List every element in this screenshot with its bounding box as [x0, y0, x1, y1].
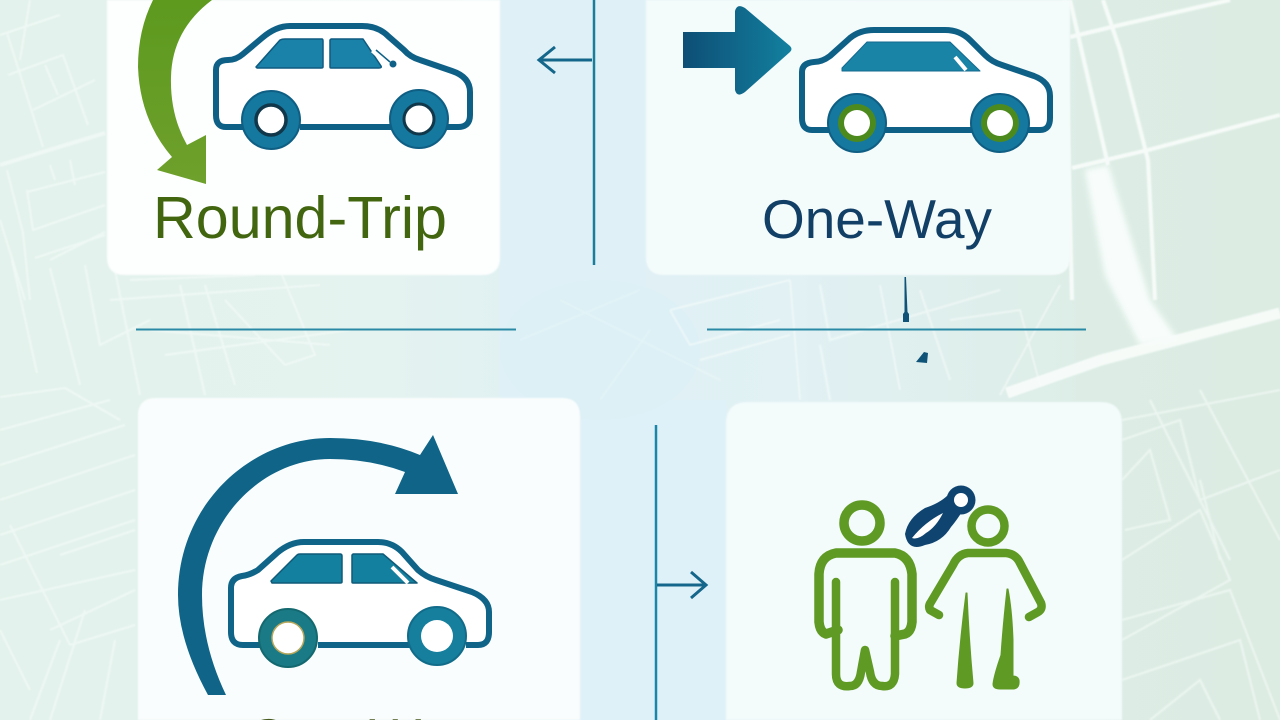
icon: car — [802, 30, 1050, 152]
horizontal divider right with down arrow — [707, 277, 1086, 363]
horizontal divider left — [136, 328, 516, 330]
icon: blue arrow — [683, 6, 792, 95]
icon: green curved arrow — [138, 0, 212, 184]
divider with left arrow — [539, 0, 594, 265]
panel: one-way — [646, 0, 1070, 275]
icon: car — [231, 542, 489, 667]
panel: round-trip — [107, 0, 500, 275]
panel: third option — [138, 398, 580, 720]
divider with right arrow — [656, 425, 706, 720]
icon: person left — [819, 505, 912, 686]
panel: people sharing a key — [726, 402, 1122, 720]
label: One-Way: One-Way — [762, 188, 992, 250]
icon: car — [216, 26, 470, 149]
label: Round-Trip: Round-Trip — [153, 185, 447, 251]
icon: person right — [929, 510, 1042, 689]
icon: blue curved arrow — [178, 435, 458, 695]
icon: key — [905, 486, 976, 547]
